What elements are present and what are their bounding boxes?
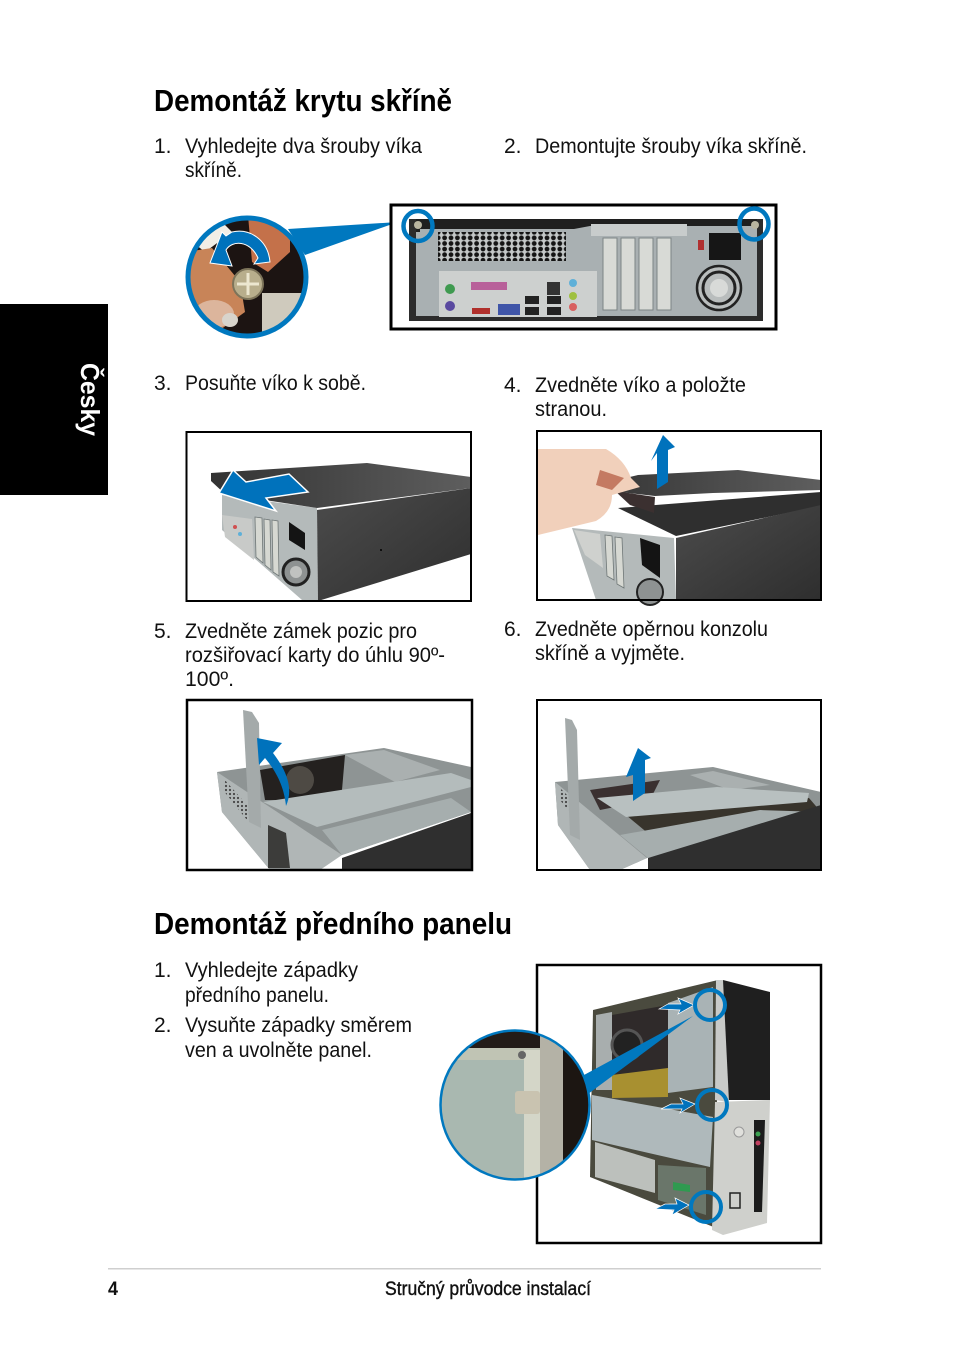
footer title: Stručný průvodce instalací xyxy=(385,1279,592,1300)
step 1 text xyxy=(154,135,422,182)
callout: latch close-up xyxy=(440,1016,693,1184)
step 1 text: skříně. xyxy=(185,159,242,182)
step 4 text xyxy=(504,374,746,421)
step 6 text: 6. xyxy=(504,618,522,641)
sidebar tab xyxy=(0,304,108,495)
step 5 text: 100º. xyxy=(185,668,234,691)
photo: rear panel xyxy=(391,205,776,329)
step 2 text: 2. xyxy=(504,135,522,158)
step 5 text: Zvedněte zámek pozic pro xyxy=(185,620,417,643)
step 5 text: 5. xyxy=(154,620,172,643)
photo: tower with front panel latches xyxy=(537,965,821,1243)
front panel steps text: 1. xyxy=(154,959,172,982)
front panel steps text: Vysuňte západky směrem xyxy=(185,1014,412,1037)
step 5 text xyxy=(154,620,445,691)
step 6 text: skříně a vyjměte. xyxy=(535,642,685,665)
photo: lift cover xyxy=(537,431,821,605)
front panel steps text: 2. xyxy=(154,1014,172,1037)
step 2 text: Demontujte šrouby víka skříně. xyxy=(535,135,807,158)
step 1 text: Vyhledejte dva šrouby víka xyxy=(185,135,422,158)
sidebar tab: Česky xyxy=(75,363,105,437)
front panel steps text: předního panelu. xyxy=(185,984,329,1007)
step 6 text xyxy=(504,618,768,665)
front panel steps text: Vyhledejte západky xyxy=(185,959,358,982)
step 4 text: stranou. xyxy=(535,398,607,421)
photo: slide cover xyxy=(186,432,471,601)
step 4 text: 4. xyxy=(504,374,522,397)
front panel steps text: ven a uvolněte panel. xyxy=(185,1039,372,1062)
footer rule xyxy=(108,1268,821,1270)
page number: 4 xyxy=(108,1279,118,1300)
callout: screw close-up xyxy=(185,215,398,343)
photo: raise expansion-card lock xyxy=(187,700,472,870)
heading: cover removal: Demontáž krytu skříně xyxy=(154,83,452,118)
step 6 text: Zvedněte opěrnou konzolu xyxy=(535,618,768,641)
step 4 text: Zvedněte víko a položte xyxy=(535,374,746,397)
front panel steps text xyxy=(154,959,412,1062)
step 3 text: Posuňte víko k sobě. xyxy=(185,372,366,395)
step 1 text: 1. xyxy=(154,135,172,158)
heading: front panel removal: Demontáž předního panelu xyxy=(154,906,512,941)
photo: remove support bracket xyxy=(537,700,821,870)
step 3 text: 3. xyxy=(154,372,172,395)
step 5 text: rozšiřovací karty do úhlu 90º- xyxy=(185,644,445,667)
